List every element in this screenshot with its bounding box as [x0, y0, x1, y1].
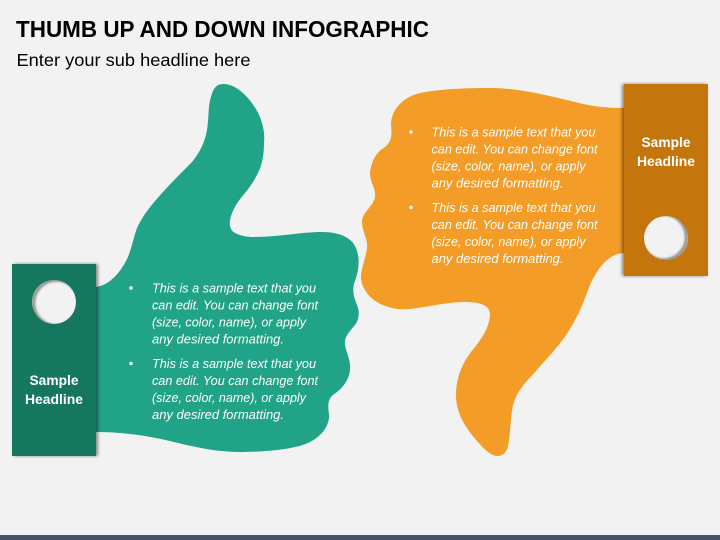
text block: first bullet: any desired formatting.: [152, 332, 284, 346]
text block: second bullet: This is a sample text that you: [432, 201, 596, 215]
text block: first bullet: can edit. You can change font: [152, 298, 319, 312]
text block: first bullet: can edit. You can change font: [432, 142, 598, 156]
text block: second bullet: (size, color, name), or apply: [432, 235, 586, 249]
text block: second bullet: This is a sample text that you: [152, 357, 316, 371]
text block: first bullet: This is a sample text that you: [432, 126, 596, 140]
tab headline: Sample: [30, 372, 79, 388]
text block: first bullet: This is a sample text that you: [152, 282, 316, 296]
tab headline: [25, 372, 83, 407]
text block: second bullet: (size, color, name), or apply: [152, 391, 307, 405]
text block: first bullet: any desired formatting.: [432, 176, 564, 190]
tab: green tag: [12, 264, 96, 456]
subtitle: Enter your sub headline here: [16, 50, 250, 70]
tab headline: Headline: [25, 391, 83, 407]
text block: first bullet: (size, color, name), or apply: [432, 160, 586, 174]
tab headline: [637, 134, 695, 169]
tab hole: [32, 280, 76, 324]
panel: thumb down: [361, 84, 708, 456]
title: THUMB UP AND DOWN INFOGRAPHIC: [16, 16, 429, 42]
text block: second bullet: can edit. You can change font: [152, 374, 319, 388]
text block: first bullet: [129, 282, 319, 346]
tab headline: Sample: [642, 134, 691, 150]
text block: first bullet: [409, 126, 598, 190]
tab hole: [644, 216, 688, 260]
text block: second bullet: [409, 201, 598, 266]
text block: second bullet: can edit. You can change font: [432, 218, 598, 232]
thumb up shape: [96, 84, 359, 452]
tab headline: Headline: [637, 153, 695, 169]
thumb down shape: [361, 88, 624, 456]
text block: second bullet: any desired formatting.: [152, 408, 284, 422]
text block: second bullet: any desired formatting.: [432, 252, 564, 266]
text block: first bullet: (size, color, name), or apply: [152, 316, 307, 330]
panel: thumb up: [12, 84, 359, 456]
tab: orange tag: [624, 84, 708, 276]
footer bar: [0, 535, 720, 540]
text block: second bullet: [129, 357, 319, 422]
